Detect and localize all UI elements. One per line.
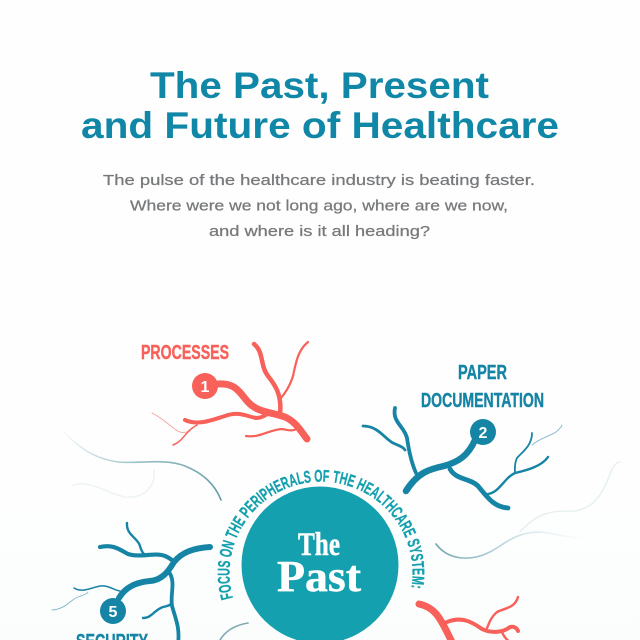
number badge 5 bbox=[100, 598, 126, 624]
title: and Future of Healthcare bbox=[81, 105, 559, 146]
number badge 1 bbox=[192, 373, 218, 399]
number badge 5: 5 bbox=[109, 604, 118, 621]
hub title: Past bbox=[277, 552, 361, 601]
branches: paper documentation vein bbox=[363, 408, 562, 508]
the past hub bbox=[218, 470, 424, 640]
label: paper documentation: PAPER bbox=[458, 362, 507, 384]
title: The Past, Present bbox=[150, 65, 489, 106]
number badge 1: 1 bbox=[201, 379, 210, 396]
label: paper documentation: DOCUMENTATION bbox=[421, 390, 544, 412]
number badge 2: 2 bbox=[479, 425, 488, 442]
hub title bbox=[277, 527, 361, 601]
title bbox=[81, 65, 559, 146]
decorative flowing lines: right bbox=[436, 462, 620, 558]
intro text bbox=[103, 172, 535, 240]
label: paper documentation bbox=[421, 362, 544, 412]
branches: security vein bbox=[52, 523, 210, 640]
hub circle bbox=[242, 486, 398, 640]
label: processes: PROCESSES bbox=[141, 342, 229, 364]
vein group 3: partial red vein, lower right bbox=[419, 597, 518, 640]
intro text: and where is it all heading? bbox=[209, 223, 430, 240]
hub title: The bbox=[298, 527, 340, 563]
vein group 1: processes bbox=[141, 342, 308, 445]
curved caption: FOCUS ON THE PERIPHERALS OF THE HEALTHCARE SYSTEM: bbox=[218, 470, 424, 600]
decorative flowing lines: left bbox=[60, 428, 248, 640]
intro text: Where were we not long ago, where are we now, bbox=[130, 198, 508, 214]
vein group 2: paper documentation bbox=[363, 362, 562, 508]
number badge 2 bbox=[470, 419, 496, 445]
vein group 5: security bbox=[52, 523, 210, 640]
branches: processes vein bbox=[152, 342, 308, 445]
intro text: The pulse of the healthcare industry is beating faster. bbox=[103, 172, 535, 189]
